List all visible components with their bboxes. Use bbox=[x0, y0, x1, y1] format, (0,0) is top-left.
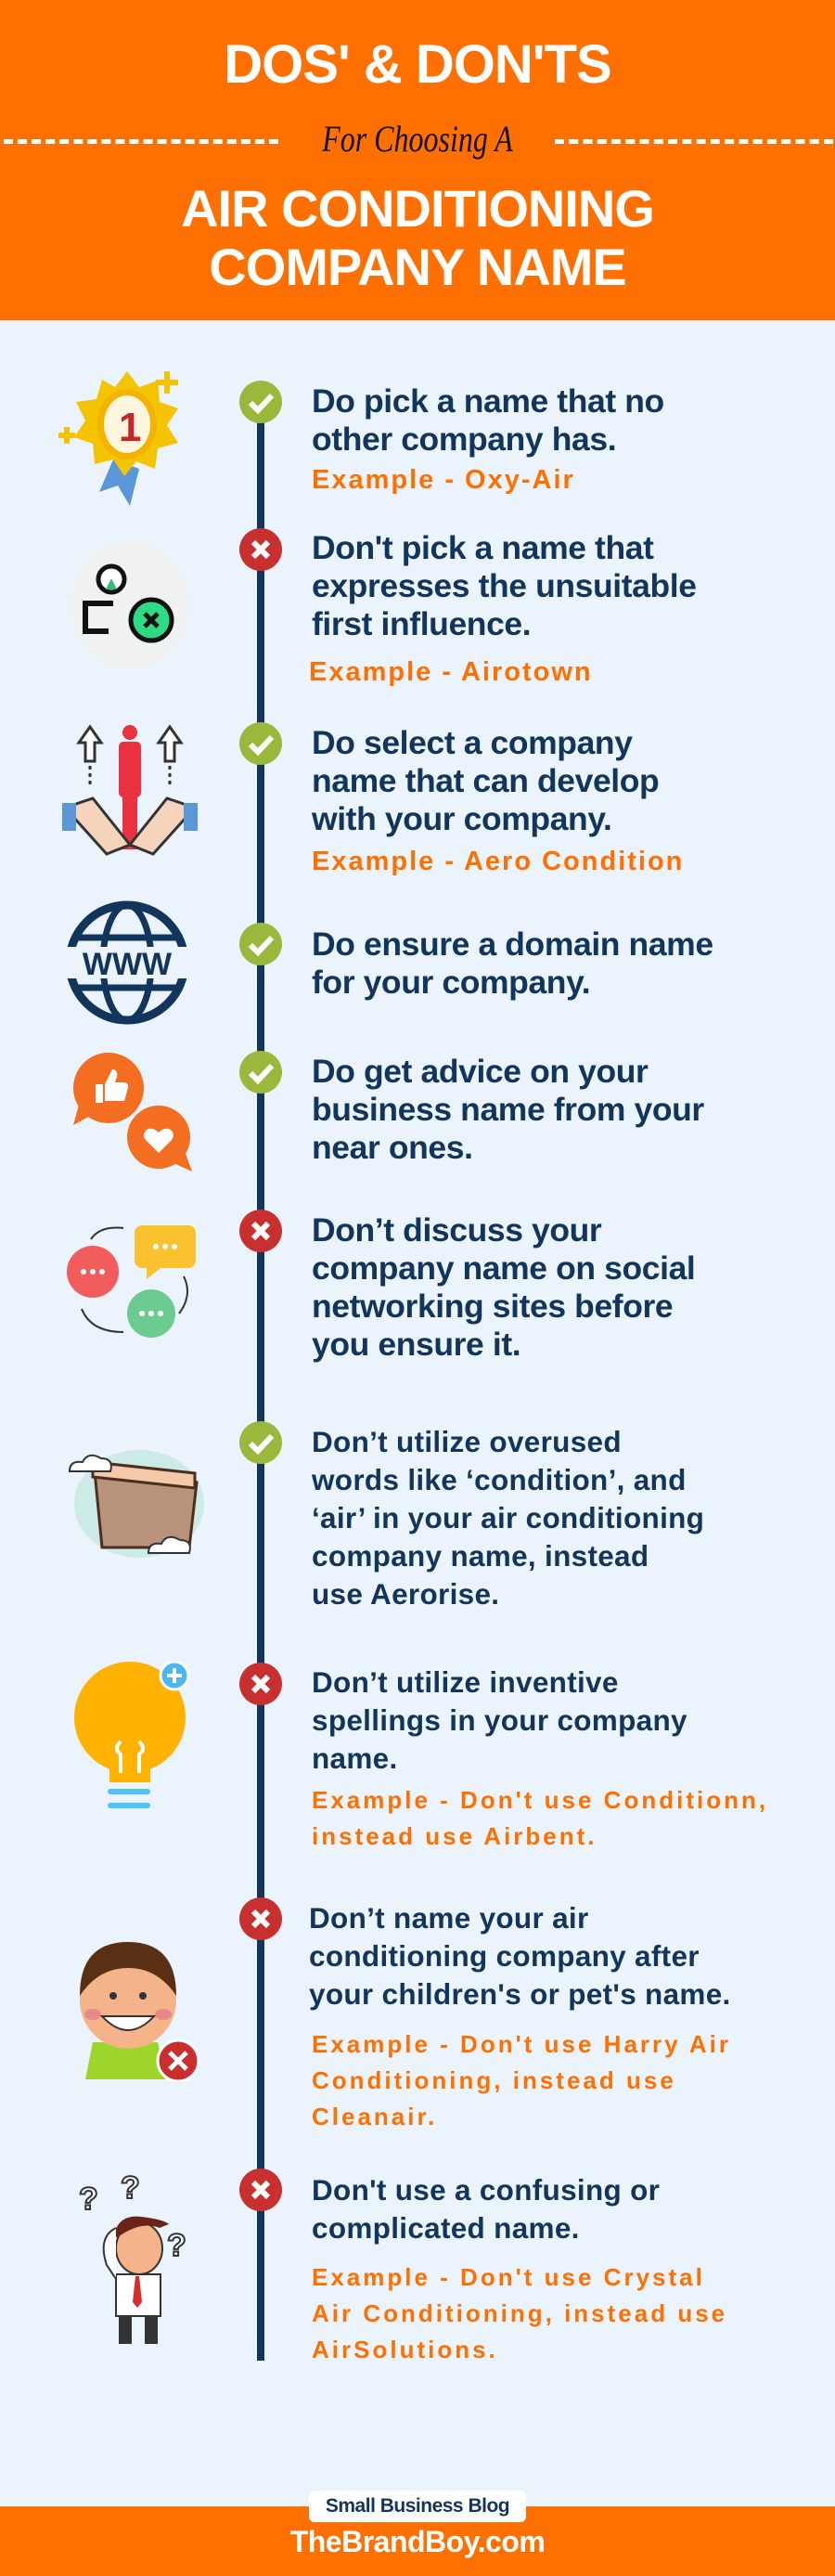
title: air conditioning company name: COMPANY NAME bbox=[209, 238, 626, 296]
text: don't name after children or pets: Cleanair. bbox=[312, 2103, 437, 2130]
check mark bbox=[239, 381, 282, 423]
icon: social chat bubbles bbox=[67, 1225, 196, 1338]
text: avoid overused words bbox=[312, 1425, 704, 1611]
item 4 bbox=[67, 900, 713, 1025]
icon: chat bubbles like heart bbox=[73, 1053, 192, 1171]
text: get advice: Do get advice on your bbox=[312, 1053, 648, 1090]
text: don't discuss on social bbox=[312, 1211, 695, 1363]
icon: www globe: WWW bbox=[83, 947, 173, 982]
text: avoid inventive spellings: Example - Don't use Conditionn, bbox=[312, 1786, 768, 1814]
text: do pick unique name: other company has. bbox=[312, 421, 616, 458]
text: do pick unique name bbox=[312, 382, 664, 495]
text: get advice bbox=[312, 1053, 704, 1166]
text: avoid confusing name: AirSolutions. bbox=[312, 2336, 498, 2363]
check mark bbox=[239, 1051, 282, 1094]
text: select growable name: name that can develop bbox=[312, 762, 659, 799]
item 5 bbox=[73, 1051, 704, 1171]
text: do pick unique name: Do pick a name that no bbox=[312, 382, 664, 420]
text: don't name after children or pets bbox=[309, 1901, 731, 2130]
dashed divider with subtitle bbox=[4, 118, 833, 160]
text: avoid confusing name: complicated name. bbox=[312, 2211, 580, 2245]
text: don't pick unsuitable name: first influence. bbox=[312, 605, 531, 642]
item 7 bbox=[69, 1421, 704, 1611]
item 3 bbox=[62, 722, 684, 876]
icon: www globe bbox=[67, 900, 187, 1025]
text: select growable name: Do select a company bbox=[312, 724, 633, 761]
item 2 bbox=[71, 528, 697, 687]
icon: confused man: ? bbox=[79, 2181, 98, 2217]
icon: medal bbox=[58, 371, 178, 506]
icon: confused man bbox=[79, 2172, 186, 2344]
x mark bbox=[239, 528, 282, 571]
text: avoid inventive spellings: Don’t utilize inventive bbox=[312, 1665, 619, 1699]
x mark bbox=[239, 1663, 282, 1705]
text: get advice: business name from your bbox=[312, 1091, 704, 1128]
check mark bbox=[239, 1421, 282, 1464]
text: avoid confusing name: Air Conditioning, instead use bbox=[312, 2299, 727, 2327]
text: ensure domain: for your company. bbox=[312, 964, 590, 1001]
text: avoid inventive spellings bbox=[312, 1665, 768, 1850]
x mark bbox=[239, 2168, 282, 2211]
badge: small business blog: Small Business Blog bbox=[326, 2495, 509, 2517]
header banner bbox=[0, 0, 835, 320]
text: don't pick unsuitable name: Example - Airotown bbox=[309, 657, 593, 687]
text: select growable name: Example - Aero Condition bbox=[312, 847, 684, 876]
text: avoid inventive spellings: instead use Airbent. bbox=[312, 1822, 597, 1850]
text: avoid inventive spellings: name. bbox=[312, 1741, 398, 1775]
badge: small business blog bbox=[309, 2491, 526, 2522]
timeline line bbox=[257, 402, 264, 2361]
title: air conditioning company name: AIR CONDITIONING bbox=[181, 179, 654, 238]
text: don't discuss on social: you ensure it. bbox=[312, 1326, 520, 1363]
text: avoid confusing name bbox=[312, 2173, 727, 2363]
text: avoid confusing name: Don't use a confusing or bbox=[312, 2173, 660, 2207]
x mark bbox=[239, 1897, 282, 1940]
x mark bbox=[239, 1210, 282, 1252]
text: avoid overused words: words like ‘condition’, and bbox=[312, 1463, 687, 1496]
text: don't name after children or pets: conditioning company after bbox=[309, 1939, 700, 1973]
footer site name: TheBrandBoy.com bbox=[290, 2525, 545, 2558]
item 10 bbox=[79, 2168, 727, 2363]
text: avoid overused words: Don’t utilize overused bbox=[312, 1425, 622, 1458]
text: do pick unique name: Example - Oxy-Air bbox=[312, 465, 575, 495]
text: don't pick unsuitable name bbox=[309, 529, 697, 687]
text: don't pick unsuitable name: Don't pick a name that bbox=[312, 529, 654, 566]
item 6 bbox=[67, 1210, 695, 1363]
text: ensure domain bbox=[312, 926, 713, 1001]
icon: user with x bbox=[71, 540, 189, 668]
text: avoid overused words: ‘air’ in your air conditioning bbox=[312, 1501, 704, 1534]
item 8 bbox=[74, 1662, 768, 1850]
icon: medal: 1 bbox=[119, 405, 141, 450]
icon: hands with figure bbox=[62, 724, 198, 856]
text: avoid confusing name: Example - Don't use Crystal bbox=[312, 2263, 705, 2291]
text: avoid overused words: use Aerorise. bbox=[312, 1577, 499, 1611]
text: don't pick unsuitable name: expresses the unsuitable bbox=[312, 567, 697, 604]
icon: light bulb bbox=[74, 1662, 189, 1808]
item 9 bbox=[80, 1897, 731, 2130]
item 1 bbox=[58, 371, 664, 506]
check mark bbox=[239, 722, 282, 765]
text: don't discuss on social: Don’t discuss your bbox=[312, 1211, 601, 1249]
text: avoid overused words: company name, instead bbox=[312, 1539, 649, 1573]
icon: box with clouds bbox=[69, 1450, 204, 1558]
text: select growable name: with your company. bbox=[312, 800, 612, 837]
text: don't name after children or pets: Conditioning, instead use bbox=[312, 2066, 676, 2094]
check mark bbox=[239, 923, 282, 965]
text: don't name after children or pets: your children's or pet's name. bbox=[309, 1977, 731, 2011]
title: air conditioning company name bbox=[181, 179, 654, 296]
text: don't discuss on social: networking sites before bbox=[312, 1288, 673, 1325]
icon: boy with x bbox=[80, 1942, 200, 2083]
footer bbox=[0, 2506, 835, 2576]
text: don't name after children or pets: Example - Don't use Harry Air bbox=[312, 2030, 731, 2058]
title: dos and don'ts: DOS' & DON'TS bbox=[224, 34, 611, 95]
text: don't discuss on social: company name on social bbox=[312, 1249, 695, 1287]
dashed divider with subtitle: For Choosing A bbox=[322, 118, 513, 160]
text: avoid inventive spellings: spellings in your company bbox=[312, 1703, 687, 1737]
icon: confused man: ? bbox=[167, 2228, 186, 2263]
text: get advice: near ones. bbox=[312, 1129, 473, 1166]
text: don't name after children or pets: Don’t name your air bbox=[309, 1901, 589, 1935]
text: ensure domain: Do ensure a domain name bbox=[312, 926, 713, 963]
text: select growable name bbox=[312, 724, 684, 876]
